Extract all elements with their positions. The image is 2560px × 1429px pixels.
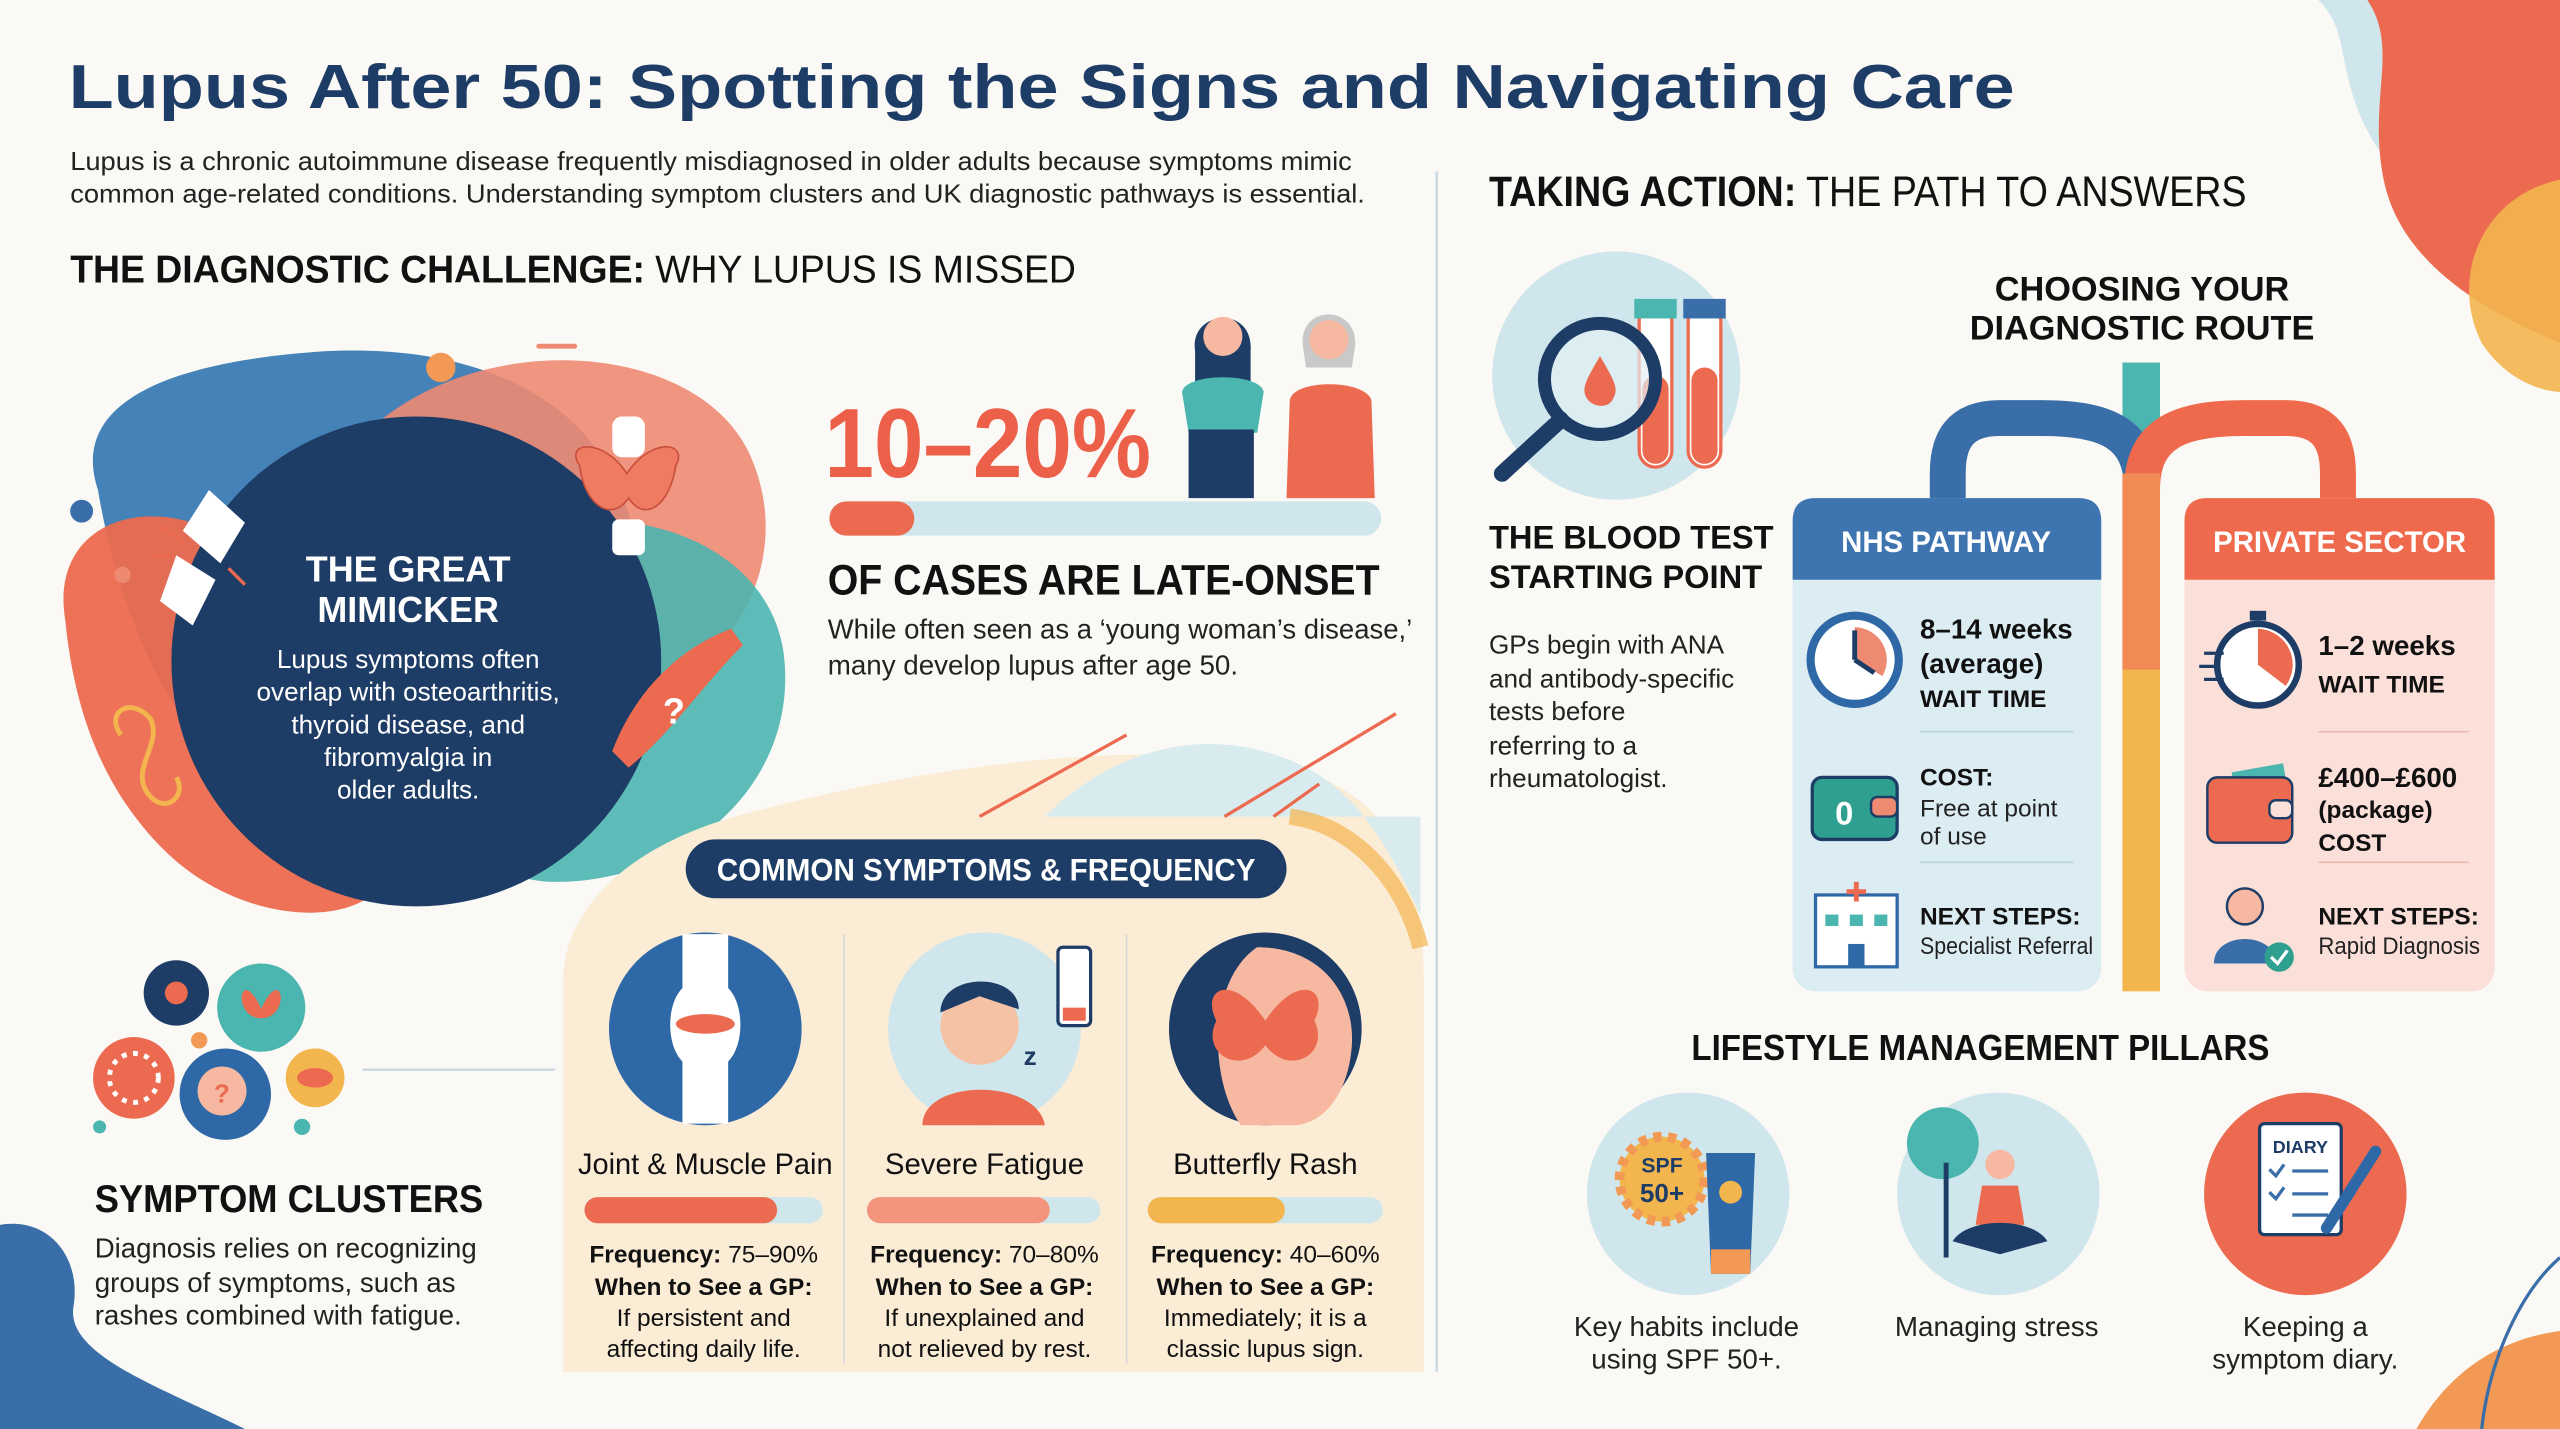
column: fatigue	[867, 933, 1100, 1363]
card: private sector: NEXT STEPS:	[2318, 903, 2479, 930]
panel: symptom clusters	[93, 960, 555, 1330]
panel: great mimicker blobs	[64, 346, 785, 913]
panel: symptom clusters: Diagnosis relies on recognizing	[95, 1233, 477, 1264]
text: the great mimicker: MIMICKER	[317, 589, 499, 630]
column: joint pain: If persistent and	[617, 1305, 791, 1332]
intro text: Lupus is a chronic autoimmune disease frequently misdiagnosed in older adults because symptoms mimic	[70, 146, 1352, 176]
icon: sunscreen: SPF	[1641, 1155, 1683, 1178]
panel: lifestyle management pillars: LIFESTYLE MANAGEMENT PILLARS	[1691, 1027, 2269, 1068]
column: joint pain	[578, 933, 833, 1363]
text: the great mimicker: THE GREAT	[306, 548, 511, 589]
panel: lifestyle management pillars: Keeping a	[2243, 1311, 2368, 1342]
text: the great mimicker: thyroid disease, and	[291, 709, 525, 739]
stat: late onset: OF CASES ARE LATE-ONSET	[828, 556, 1380, 603]
column: butterfly rash: Immediately; it is a	[1164, 1305, 1367, 1332]
panel: choosing diagnostic route	[1793, 270, 2495, 991]
column: butterfly rash	[1148, 933, 1383, 1363]
panel: symptom clusters: rashes combined with fatigue.	[95, 1299, 462, 1330]
card: NHS pathway: Specialist Referral	[1920, 934, 2093, 960]
card: private sector: £400–£600	[2318, 762, 2457, 793]
text: the great mimicker: overlap with osteoarthritis,	[257, 677, 560, 707]
icon: cluster circles	[93, 960, 555, 1140]
pipes	[1948, 363, 2338, 991]
header pill	[686, 839, 1287, 898]
panel: choosing diagnostic route: CHOOSING YOUR	[1995, 270, 2290, 308]
panel: blood test starting point: referring to a	[1489, 731, 1637, 761]
column: fatigue: When to See a GP:	[876, 1274, 1093, 1301]
panel: lifestyle management pillars: symptom diary.	[2212, 1344, 2398, 1375]
panel: symptom clusters: groups of symptoms, such as	[95, 1267, 456, 1298]
panel: lifestyle management pillars	[1574, 1027, 2407, 1375]
card: private sector: PRIVATE SECTOR	[2213, 526, 2466, 559]
icon: magnifier and tubes	[1492, 252, 1740, 500]
section heading: diagnostic challenge: THE DIAGNOSTIC CHALLENGE: WHY LUPUS IS MISSED	[70, 249, 1076, 292]
icon: muscle: ?	[663, 690, 685, 731]
column: joint pain: When to See a GP:	[595, 1274, 812, 1301]
card: NHS pathway: (average)	[1920, 648, 2043, 679]
column: fatigue: Frequency: 70–80%	[870, 1241, 1099, 1268]
card: NHS pathway	[1793, 498, 2101, 991]
panel: blood test starting point: rheumatologist.	[1489, 763, 1667, 793]
icon: thyroid	[576, 416, 679, 555]
icon: diary	[2204, 1093, 2407, 1295]
column: butterfly rash: classic lupus sign.	[1167, 1336, 1364, 1363]
icon: meditation	[1897, 1093, 2100, 1295]
panel: blood test starting point: STARTING POINT	[1489, 558, 1762, 595]
header pill: COMMON SYMPTOMS & FREQUENCY	[717, 852, 1256, 887]
panel: blood test starting point: THE BLOOD TEST	[1489, 519, 1774, 556]
icon: two women	[1182, 314, 1375, 498]
card: private sector: Rapid Diagnosis	[2318, 934, 2480, 960]
card: NHS pathway: WAIT TIME	[1920, 686, 2046, 713]
card: private sector: (package)	[2318, 797, 2433, 824]
icon: sunscreen	[1587, 1093, 1789, 1295]
icon: diary: DIARY	[2273, 1137, 2328, 1157]
icon: muscle	[612, 629, 743, 768]
column: fatigue: If unexplained and	[884, 1305, 1085, 1332]
stat: late onset	[824, 314, 1412, 680]
stat: late onset: While often seen as a ‘young woman’s disease,’	[828, 614, 1412, 645]
intro text	[70, 146, 1365, 209]
section heading: taking action: TAKING ACTION: THE PATH TO ANSWERS	[1489, 168, 2247, 215]
stat: late onset: many develop lupus after age 50.	[828, 649, 1238, 680]
text: the great mimicker: older adults.	[337, 775, 479, 805]
card: NHS pathway: NHS PATHWAY	[1841, 526, 2052, 559]
card: private sector	[2184, 498, 2495, 991]
panel: lifestyle management pillars: Key habits include	[1574, 1311, 1799, 1342]
column: butterfly rash: When to See a GP:	[1156, 1274, 1374, 1301]
card: NHS pathway: 0	[1835, 795, 1853, 832]
column: joint pain: Frequency: 75–90%	[589, 1241, 818, 1268]
card: NHS pathway: of use	[1920, 823, 1987, 850]
column: joint pain: affecting daily life.	[607, 1336, 801, 1363]
column: fatigue: not relieved by rest.	[878, 1336, 1091, 1363]
text: the great mimicker: Lupus symptoms often	[277, 644, 539, 674]
panel: choosing diagnostic route: DIAGNOSTIC ROUTE	[1970, 310, 2314, 348]
panel: common symptoms	[563, 714, 1424, 1372]
icon: knee joint	[150, 490, 245, 625]
panel: blood test starting point: and antibody-specific	[1489, 664, 1734, 694]
column: butterfly rash: Frequency: 40–60%	[1151, 1241, 1380, 1268]
icon: sunscreen: 50+	[1640, 1178, 1684, 1208]
column: fatigue: z	[1024, 1041, 1037, 1071]
panel: symptom clusters: SYMPTOM CLUSTERS	[95, 1178, 483, 1221]
title: Lupus After 50: Spotting the Signs and Navigating Care	[69, 53, 2015, 122]
column: fatigue: Severe Fatigue	[885, 1148, 1084, 1181]
column: butterfly rash: Butterfly Rash	[1173, 1148, 1358, 1181]
panel: lifestyle management pillars: Managing stress	[1895, 1311, 2099, 1342]
panel: blood test starting point: tests before	[1489, 696, 1625, 726]
card: private sector: COST	[2318, 830, 2386, 857]
panel: lifestyle management pillars: using SPF 50+.	[1591, 1344, 1782, 1375]
intro text: common age-related conditions. Understanding symptom clusters and UK diagnostic pathways is essential.	[70, 179, 1365, 209]
panel: blood test starting point	[1489, 252, 1774, 793]
text: the great mimicker: fibromyalgia in	[324, 742, 492, 772]
text: the great mimicker	[257, 548, 560, 805]
icon: cluster circles: ?	[214, 1078, 230, 1108]
card: NHS pathway: Free at point	[1920, 796, 2058, 823]
panel: blood test starting point: GPs begin with ANA	[1489, 629, 1725, 659]
card: private sector: WAIT TIME	[2318, 671, 2445, 698]
card: NHS pathway: 8–14 weeks	[1920, 614, 2073, 645]
stat: late onset: 10–20%	[824, 388, 1151, 498]
column: joint pain: Joint & Muscle Pain	[578, 1148, 833, 1181]
card: NHS pathway: COST:	[1920, 765, 1993, 792]
card: private sector: 1–2 weeks	[2318, 630, 2456, 661]
card: NHS pathway: NEXT STEPS:	[1920, 903, 2081, 930]
